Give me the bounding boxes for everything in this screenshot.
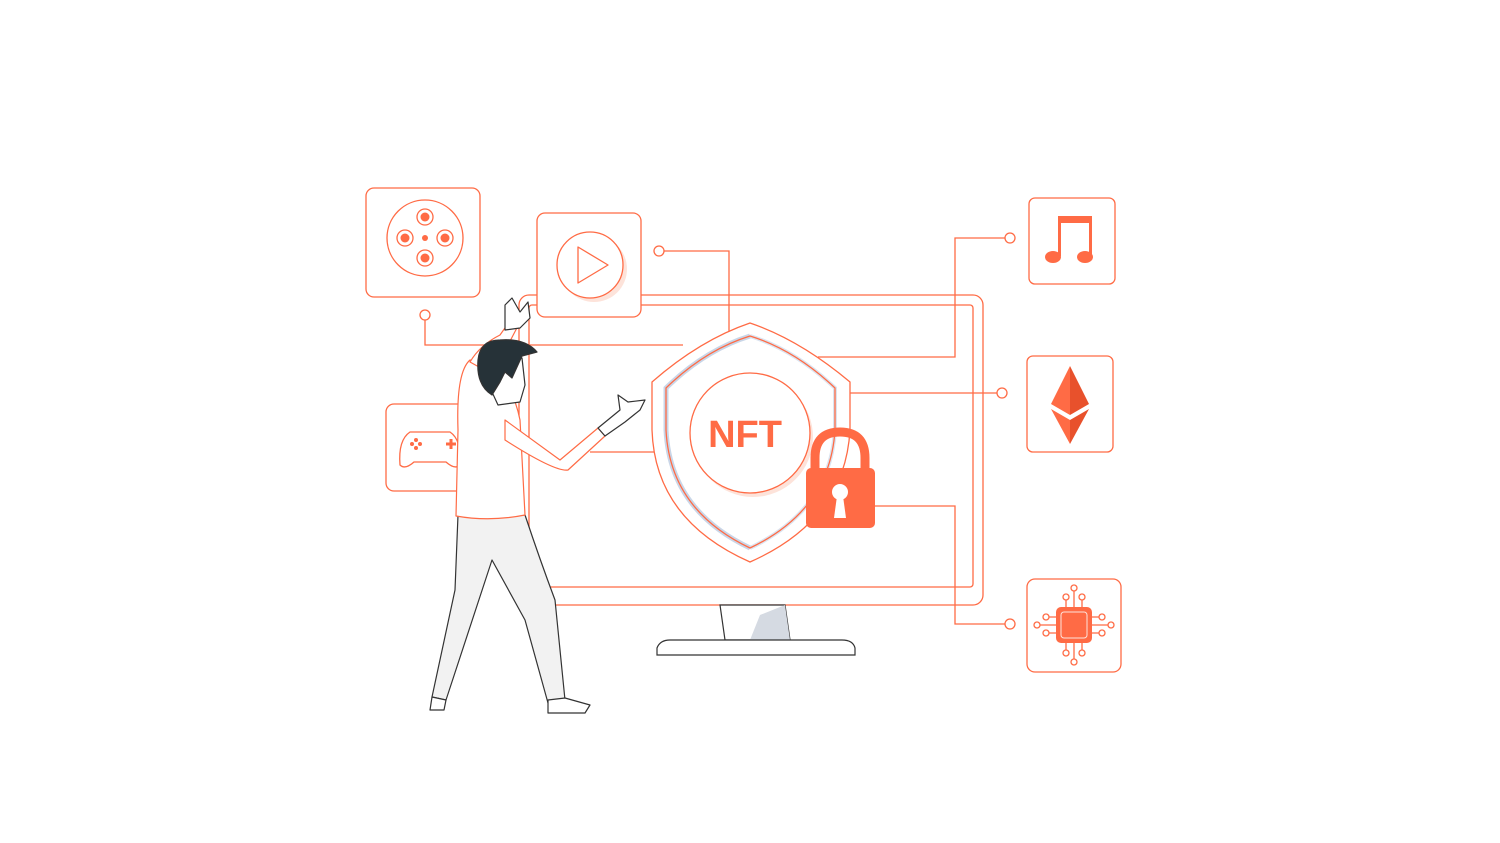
head <box>488 353 525 405</box>
reaching arm <box>505 420 605 470</box>
lock <box>806 432 875 528</box>
monitor stand <box>720 605 790 640</box>
connector lines <box>420 233 1015 629</box>
icon box: ethereum <box>1027 356 1113 452</box>
NFT emblem: NFT <box>708 414 782 456</box>
icon box: reel <box>366 188 480 297</box>
icon box: gamepad <box>386 404 466 491</box>
shield <box>652 323 850 562</box>
icon box: play <box>537 213 641 317</box>
legs <box>432 515 565 703</box>
icon box: chip <box>1027 579 1121 672</box>
icon box: music <box>1029 198 1115 284</box>
torso <box>456 360 525 519</box>
person <box>430 298 645 713</box>
monitor <box>519 295 983 655</box>
raised arm <box>470 318 520 372</box>
NFT emblem <box>690 373 813 497</box>
